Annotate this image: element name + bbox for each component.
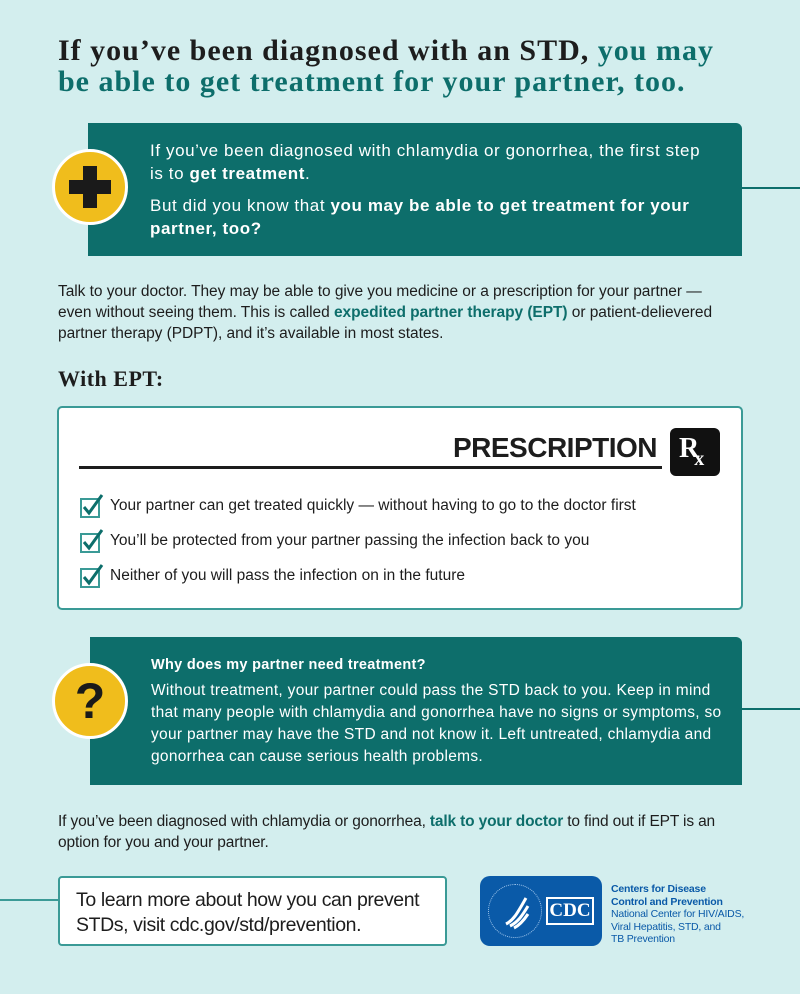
panel: prescription: [57, 406, 743, 610]
panel: get treatment: If you’ve been diagnosed with chlamydia or gonorrhea, the first step: [150, 141, 700, 160]
CDC text: TB Prevention: [611, 933, 675, 945]
CDC text: [611, 883, 744, 945]
CDC logo: CDC: [549, 900, 591, 921]
title: be able to get treatment for your partner, too.: [58, 65, 685, 98]
title: If you’ve been diagnosed with an STD, you may: [58, 34, 714, 67]
icon: Rx: [670, 428, 720, 476]
heading: With EPT: With EPT:: [58, 366, 164, 391]
closing text: option for you and your partner.: [58, 834, 269, 851]
title: [58, 34, 714, 98]
CDC text: Control and Prevention: [611, 896, 723, 908]
closing text: If you’ve been diagnosed with chlamydia or gonorrhea, talk to your doctor to find out if EPT is an: [58, 813, 715, 830]
panel: why treatment: [90, 637, 742, 785]
connector line 2: [742, 708, 800, 710]
checklist: Neither of you will pass the infection on in the future: [110, 566, 465, 584]
panel: get treatment: partner, too?: [150, 219, 262, 238]
icon: Rx: Rx: [679, 433, 704, 470]
checklist: Your partner can get treated quickly — without having to go to the doctor first: [110, 496, 636, 514]
closing text: [58, 813, 715, 851]
intro paragraph: even without seeing them. This is called expedited partner therapy (EPT) or patient-delievered: [58, 304, 712, 321]
panel: why treatment: Without treatment, your partner could pass the STD back to you. Keep in mind: [151, 682, 711, 699]
icon: question: [52, 663, 128, 739]
CDC text: Centers for Disease: [611, 883, 706, 895]
panel: why treatment: gonorrhea can cause serious health problems.: [151, 748, 483, 765]
panel: get treatment: [88, 123, 742, 256]
prescription heading: PRESCRIPTION: [453, 432, 657, 463]
callout: learn more: [58, 876, 447, 946]
panel: get treatment: is to get treatment.: [150, 164, 310, 183]
callout: learn more: To learn more about how you can prevent STDs, visit cdc.gov/std/prevention.: [76, 889, 419, 936]
intro paragraph: Talk to your doctor. They may be able to give you medicine or a prescription for your partner —: [58, 283, 702, 300]
checklist: [80, 494, 636, 588]
panel: why treatment: Why does my partner need treatment?: [151, 657, 426, 673]
panel: why treatment: your partner may have the STD and not know it. Left untreated, chlamydia and: [151, 726, 711, 743]
connector line 3: [0, 899, 58, 901]
panel: get treatment: But did you know that you may be able to get treatment for your: [150, 196, 689, 215]
icon: question: ?: [75, 673, 105, 729]
CDC text: National Center for HIV/AIDS,: [611, 908, 744, 920]
CDC text: Viral Hepatitis, STD, and: [611, 920, 721, 932]
icon: plus: [52, 149, 128, 225]
intro paragraph: [58, 283, 712, 342]
panel: why treatment: that many people with chlamydia and gonorrhea have no signs or symptoms, so: [151, 704, 721, 721]
connector line 1: [742, 187, 800, 189]
checklist: You’ll be protected from your partner passing the infection back to you: [110, 532, 589, 548]
intro paragraph: partner therapy (PDPT), and it’s available in most states.: [58, 325, 443, 342]
CDC logo: [480, 876, 602, 946]
